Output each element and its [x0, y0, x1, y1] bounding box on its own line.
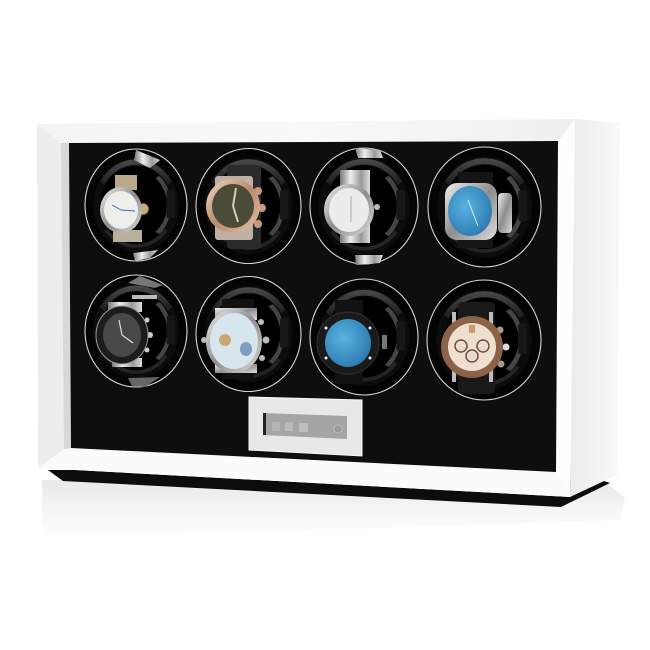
control panel	[249, 397, 362, 456]
black velvet panel	[69, 141, 558, 472]
touch screen	[263, 413, 347, 439]
pod 4 with blue dial steel watch	[428, 147, 541, 267]
winder pods and watches	[85, 147, 541, 400]
pod 6 with pale dial skeleton watch	[196, 276, 301, 392]
cabinet base	[48, 470, 610, 507]
pod 3 with steel bracelet watch	[310, 148, 418, 265]
pod 5 with black bezel diver watch	[85, 275, 187, 387]
cabinet right side	[570, 119, 620, 497]
pod 2 with rose gold chronograph	[196, 148, 301, 264]
pod 1 with two-tone dress watch	[85, 149, 187, 261]
cabinet white frame	[37, 119, 575, 497]
floor shadow and reflection	[42, 480, 625, 540]
pod 8 with rose and brown chronograph	[427, 280, 541, 400]
pod 7 with black case blue dial watch	[310, 279, 418, 395]
